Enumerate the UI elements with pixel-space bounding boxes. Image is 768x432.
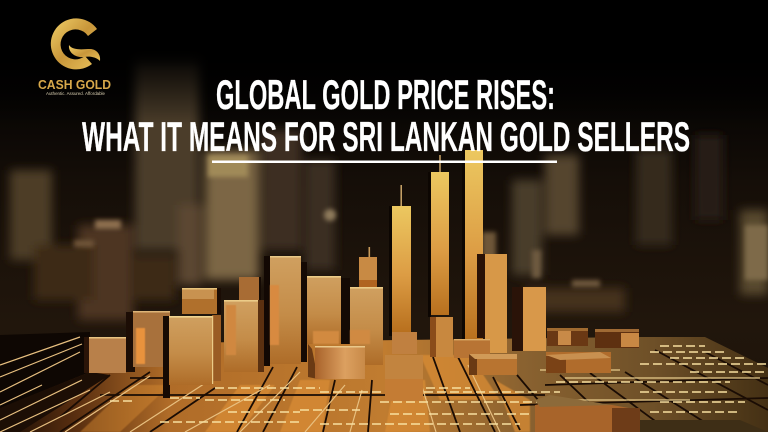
bar: seventh [307,276,350,344]
right bar [512,287,546,351]
tallest bar [462,150,483,340]
blurred highlights [74,155,768,287]
bar: fifth [224,300,264,372]
bar: eighth [350,287,383,365]
floor surface [0,337,768,432]
bar: far left [84,337,126,373]
brand name: CASH GOLD [38,77,111,92]
logo [38,18,111,96]
bar: small back block [239,277,261,300]
bar: front large [163,315,221,398]
bar: second [126,311,170,372]
foreground bar [535,395,768,432]
tagline: Authentic. Assured. Affordable [46,91,105,96]
bright orange floor patches [80,355,530,432]
top dark fade [0,0,768,125]
blurred city skyline [10,60,768,320]
box in front of the seventh bar [308,344,365,379]
icon: G emblem [51,18,100,69]
small box Q [547,328,588,346]
tall bar with antenna, middle [428,155,453,357]
bar: small raised block [182,288,221,314]
large bar beside tallest [454,254,507,358]
floor of gold bars [0,332,768,432]
floor box S [469,354,517,375]
small box R [595,329,639,348]
floor box T [546,352,611,373]
bar: spire block [359,247,377,287]
floor joint lines [60,350,768,432]
bright floor streaks on left [0,337,500,432]
title underline [212,160,557,163]
tall bar with antenna, left [385,185,423,401]
floor highlights [110,346,768,424]
title [82,71,690,160]
bar: tall sixth [264,256,307,366]
